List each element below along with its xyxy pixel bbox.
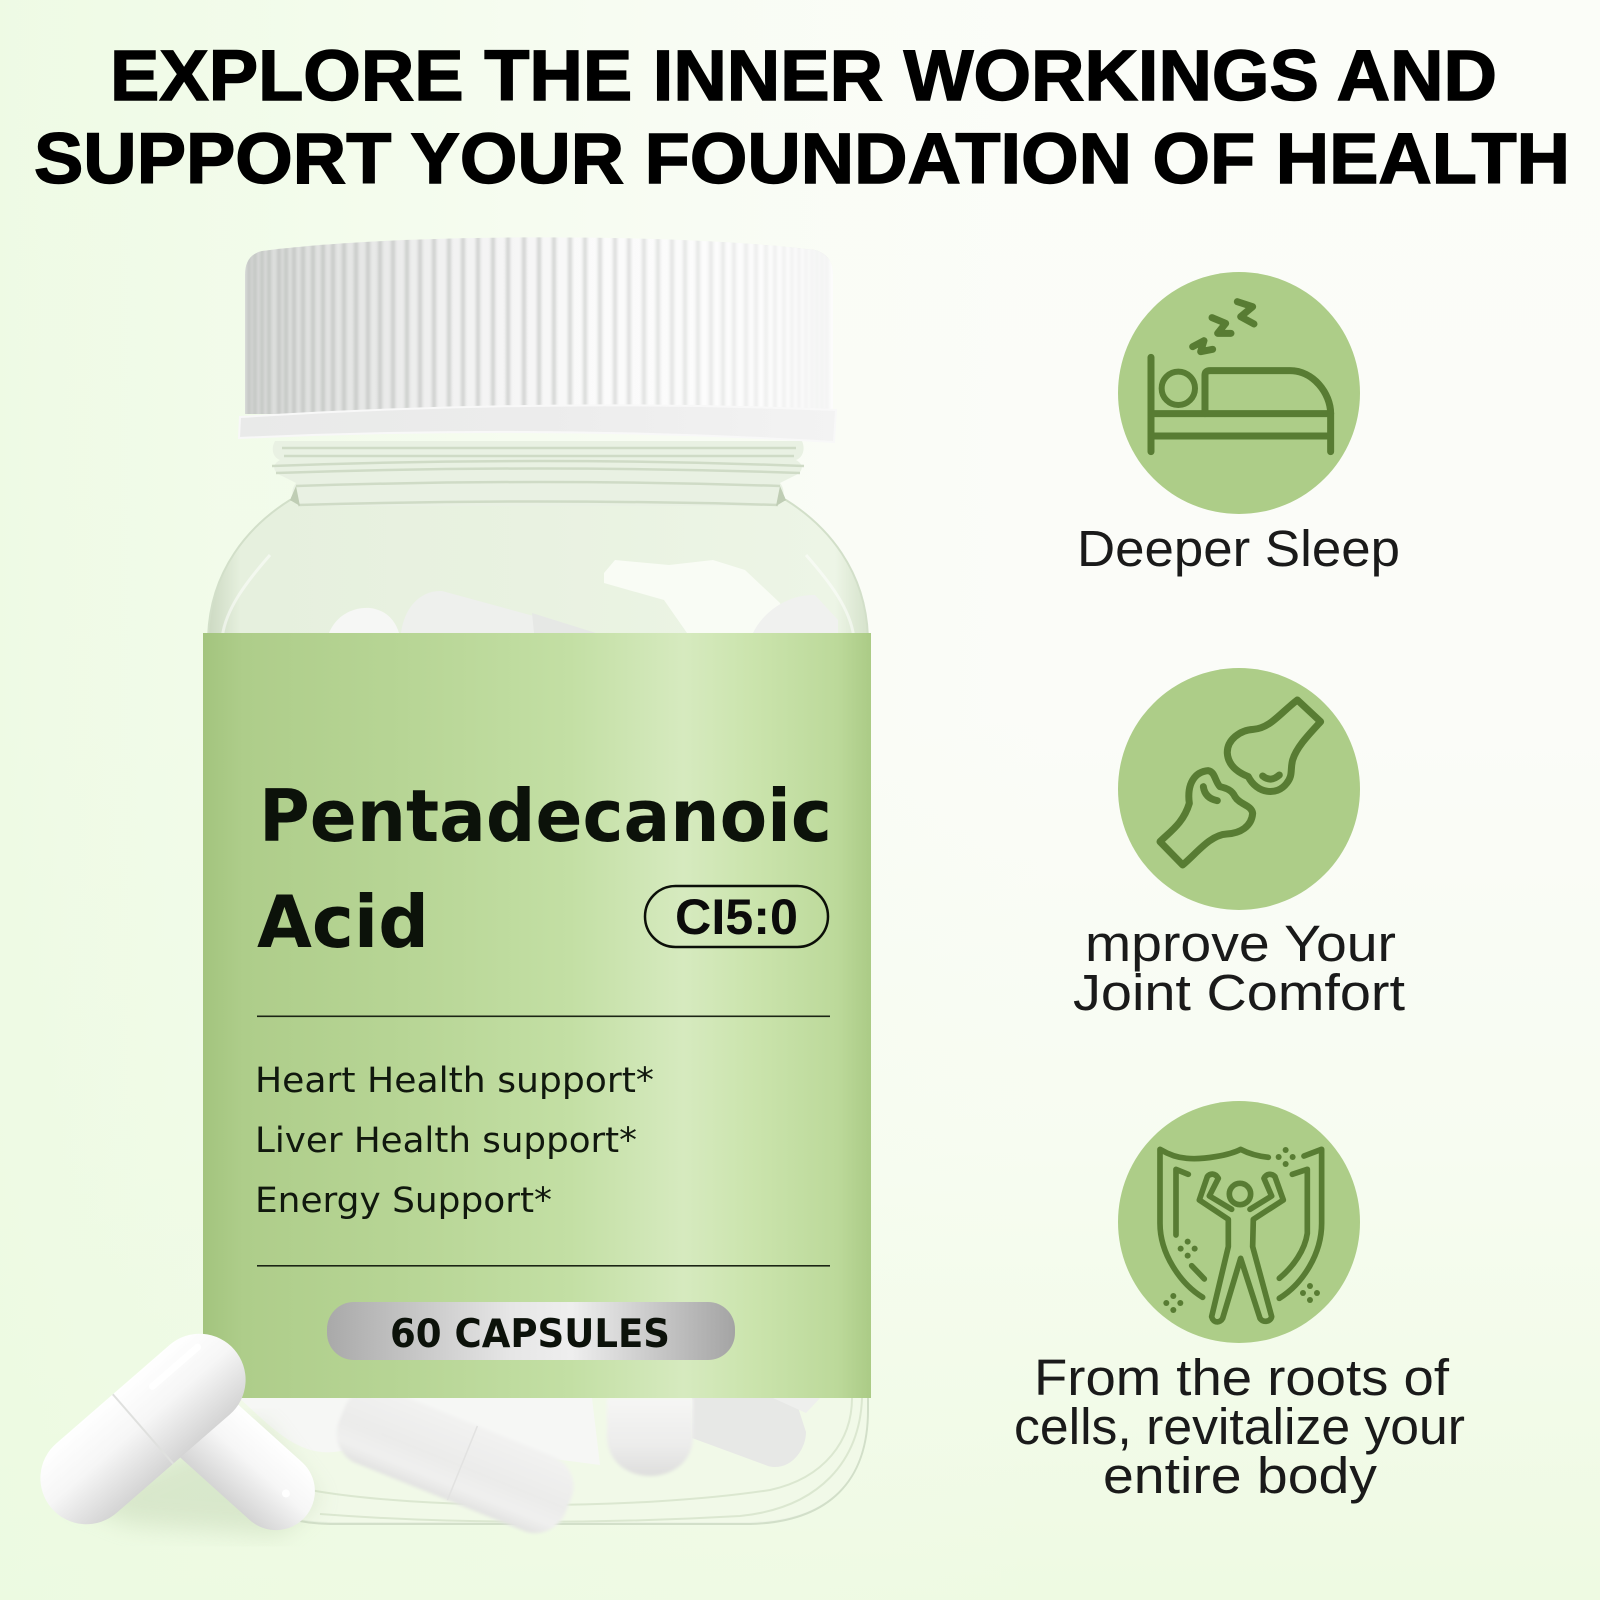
green circle sleep [1118, 272, 1360, 514]
caption: mprove Your [1085, 915, 1396, 972]
caption [1073, 915, 1405, 1021]
icon: sleeping person in bed [1151, 302, 1331, 452]
icon: person with shield [1160, 1147, 1322, 1322]
green circle joint [1118, 668, 1360, 910]
glass jar body [208, 441, 868, 1524]
benefits list: Liver Health support* [255, 1121, 637, 1161]
bottle cap [239, 232, 840, 442]
lower jar clear area [209, 1398, 867, 1522]
caption: cells, revitalize your [1014, 1398, 1465, 1455]
label name: Acid [257, 880, 429, 964]
60 capsules pill [327, 1302, 735, 1360]
caption: Joint Comfort [1073, 964, 1405, 1021]
divider bottom [257, 1265, 830, 1267]
C15:0 badge [645, 886, 828, 947]
product label [203, 633, 871, 1398]
label name [257, 774, 832, 964]
60 capsules pill: 60 CAPSULES [390, 1312, 670, 1357]
caption [1014, 1349, 1465, 1504]
capsules visible below label [239, 1377, 820, 1543]
benefits list [255, 1061, 654, 1221]
caption: Deeper Sleep [1077, 520, 1400, 577]
label name: Pentadecanoic [259, 774, 832, 858]
benefits list: Energy Support* [255, 1181, 552, 1221]
divider top [257, 1016, 830, 1017]
green circle body [1118, 1101, 1360, 1343]
jar bottom rim lines [310, 1398, 862, 1522]
title: EXPLORE THE INNER WORKINGS AND [110, 37, 1497, 116]
C15:0 badge: CI5:0 [675, 889, 798, 945]
cap band [239, 405, 836, 442]
supplement bottle [22, 232, 871, 1546]
benefit: joint comfort [1073, 668, 1405, 1021]
loose capsule small [145, 1368, 331, 1546]
loose capsule large [22, 1315, 264, 1543]
benefit: deeper sleep [1077, 272, 1400, 577]
caption: From the roots of [1034, 1349, 1450, 1406]
benefits list: Heart Health support* [255, 1061, 654, 1101]
caption: entire body [1103, 1447, 1378, 1504]
capsule shadows [70, 1420, 320, 1535]
capsules visible above label [329, 591, 838, 633]
reflection on glass [604, 560, 790, 633]
title: SUPPORT YOUR FOUNDATION OF HEALTH [34, 120, 1570, 199]
title [34, 37, 1570, 199]
benefit: revitalize body [1014, 1101, 1465, 1504]
icon: bone joint [1160, 700, 1321, 865]
